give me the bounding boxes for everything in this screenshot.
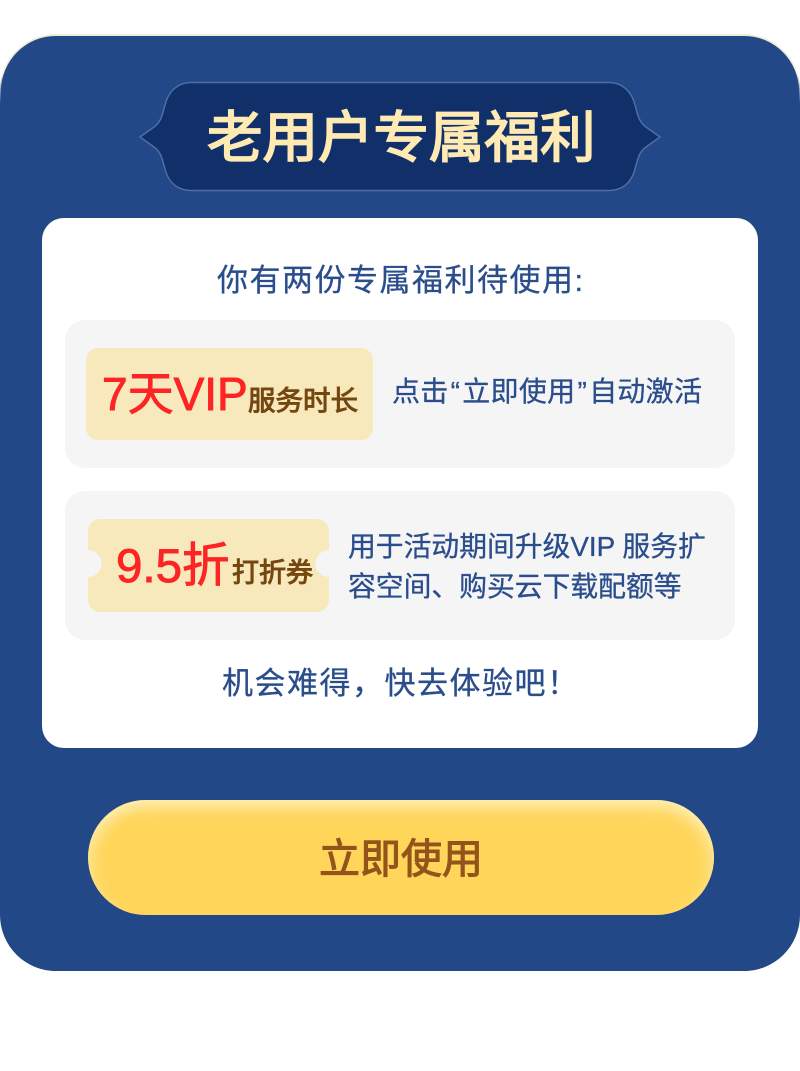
discount description: 用于活动期间升级VIP 服务扩 bbox=[348, 531, 706, 562]
panel: discount benefit row bbox=[65, 491, 735, 640]
badge main text: 7天VIP bbox=[102, 368, 248, 420]
badge: 9.5 discount ticket bbox=[88, 519, 329, 612]
discount description bbox=[348, 531, 706, 602]
badge: 7 day VIP bbox=[86, 348, 373, 440]
discount secondary text: 打折券 bbox=[232, 558, 313, 588]
heading banner shape bbox=[139, 82, 661, 192]
title: 老用户专属福利 bbox=[207, 107, 596, 169]
intro text: 你有两份专属福利待使用: bbox=[217, 263, 585, 298]
closing text: 机会难得，快去体验吧！ bbox=[222, 666, 580, 701]
VIP description: 点击“立即使用”自动激活 bbox=[392, 376, 702, 407]
discount description: 容空间、购买云下载配额等 bbox=[348, 570, 682, 602]
panel: VIP benefit row bbox=[65, 320, 735, 468]
button label: 立即使用 bbox=[319, 836, 483, 882]
button bbox=[88, 800, 714, 915]
badge secondary text: 服务时长 bbox=[248, 385, 358, 416]
discount main text: 9.5折 bbox=[116, 540, 230, 593]
panel: white card bbox=[42, 218, 758, 748]
